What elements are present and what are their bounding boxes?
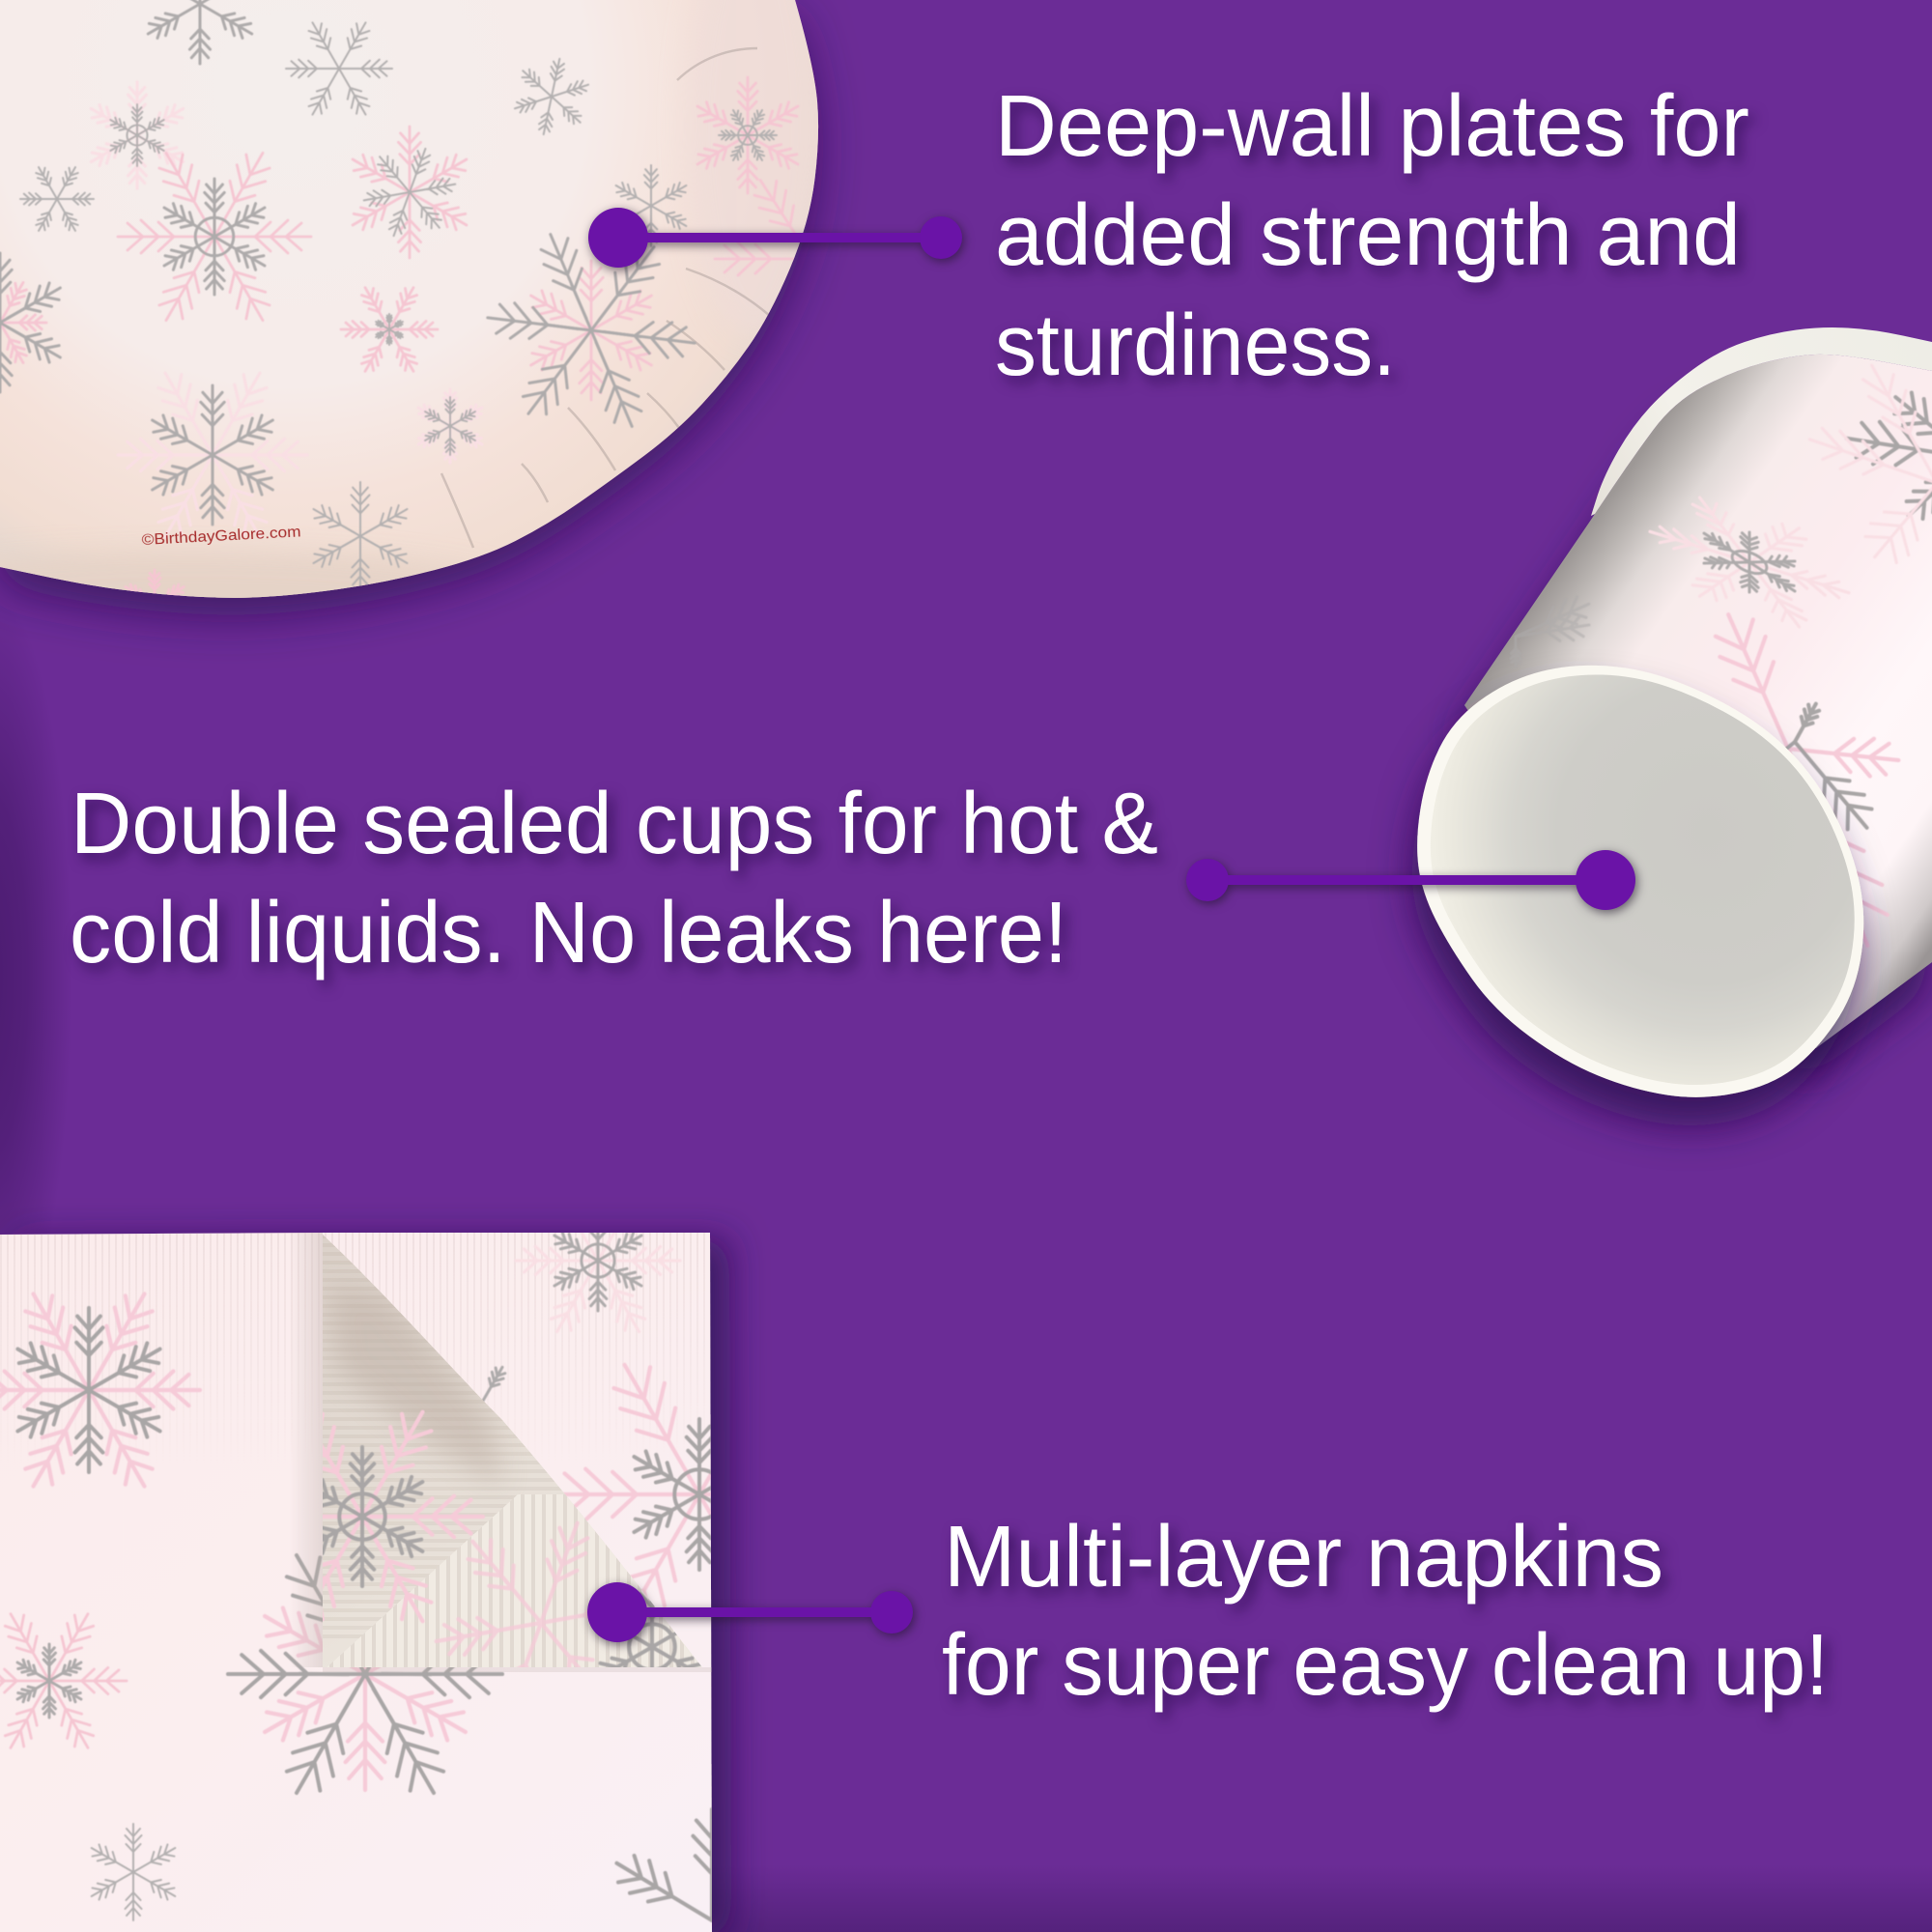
cup base wall — [1417, 666, 1863, 1097]
plate body — [0, 0, 818, 598]
panel: paper napkin — [0, 1218, 752, 1932]
callout marker: cup — [1186, 850, 1635, 910]
napkins line 2: for super easy clean up! — [942, 1617, 1829, 1714]
caption: cups — [70, 776, 1158, 981]
plates line 1: Deep-wall plates for — [995, 78, 1749, 175]
napkin folded corner — [323, 1235, 702, 1667]
caption: plates — [995, 78, 1749, 394]
cup top rim — [1591, 327, 1932, 516]
cup snowflakes — [1510, 321, 1932, 959]
napkin fold shade left — [290, 1233, 323, 1667]
plate pattern and rim — [0, 0, 825, 638]
napkins line 1: Multi-layer napkins — [944, 1509, 1663, 1605]
napkin sheet — [0, 1233, 712, 1932]
cups line 2: cold liquids. No leaks here! — [70, 885, 1067, 981]
plates line 2: added strength and — [995, 187, 1741, 284]
cup body — [1464, 355, 1932, 1048]
cups line 1: Double sealed cups for hot & — [71, 776, 1158, 872]
bottom edge vignette — [712, 1864, 1932, 1932]
panel: paper plate — [0, 0, 825, 638]
underside ribs and pattern — [323, 1235, 701, 1667]
folded corner underside — [323, 1235, 702, 1667]
caption: napkins — [942, 1509, 1829, 1714]
plates line 3: sturdiness. — [995, 298, 1396, 394]
callout marker: plate — [588, 208, 962, 268]
napkin lower fold edge — [323, 1667, 712, 1672]
callout marker: napkin — [587, 1582, 913, 1642]
plate copyright: ©BirthdayGalore.com — [141, 524, 301, 549]
panel: paper cup — [1417, 321, 1932, 1097]
napkin pattern — [0, 1233, 712, 1922]
left edge vignette — [0, 589, 72, 1362]
cup base floor — [1431, 674, 1855, 1085]
plate snowflakes — [0, 0, 825, 638]
